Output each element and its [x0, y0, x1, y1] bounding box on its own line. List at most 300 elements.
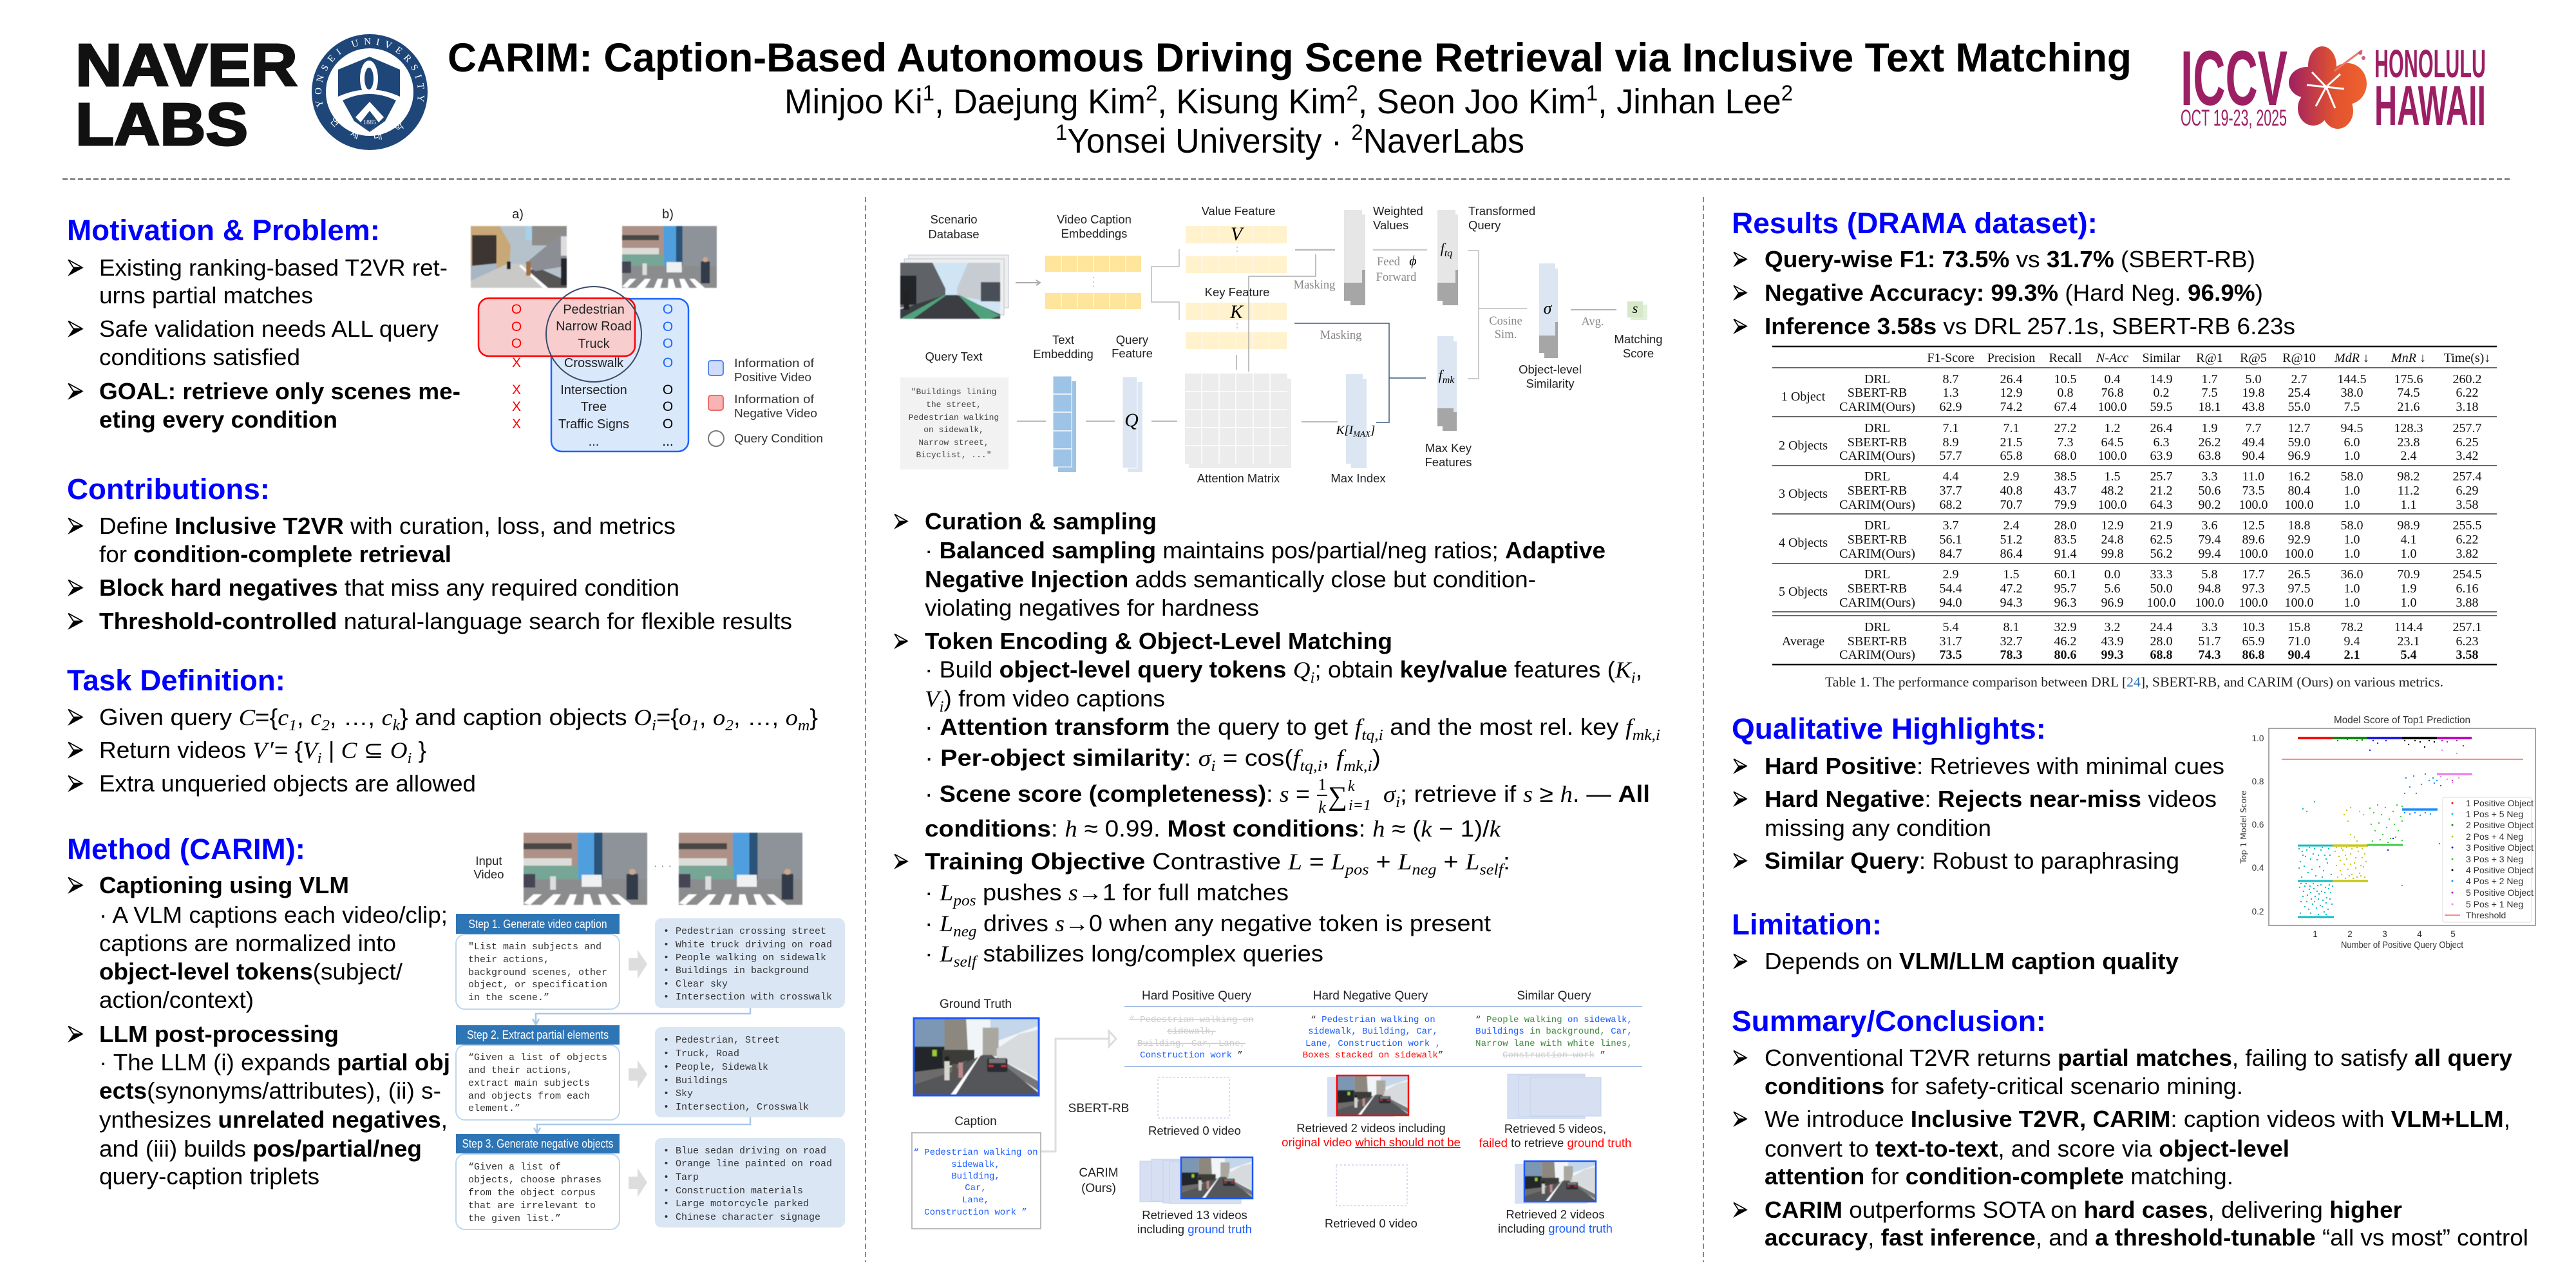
table 1: performance comparison: 5 Objects: [1779, 585, 1828, 599]
figure: qualitative retrieval comparison: [912, 989, 1642, 1236]
table 1: performance comparison: 28.0: [2150, 634, 2173, 649]
authors: , Jinhan Lee: [1598, 82, 1781, 121]
table 1: performance comparison: 89.6: [2242, 533, 2264, 547]
query text and embeddings: Pedestrian walking: [909, 413, 999, 422]
step 3: “Given a list of: [468, 1162, 561, 1173]
logo: NAVER LABS: NAVER: [75, 32, 298, 99]
arrow: step 2 to step 3: [534, 1117, 750, 1133]
query text and embeddings: Embedding: [1033, 347, 1094, 361]
step 1: in the scene.”: [468, 992, 549, 1003]
table 1: performance comparison: 100.0: [2239, 596, 2268, 610]
heading: Task Definition:: [67, 664, 285, 697]
table 1: performance comparison: 71.0: [2287, 634, 2311, 649]
table 1: performance comparison: 100.0: [2195, 596, 2224, 610]
logo: Yonsei University seal: 1885: [363, 119, 376, 126]
step 3: Chinese character signage: [676, 1212, 820, 1223]
table 1: performance comparison: 26.4: [2000, 372, 2022, 386]
curation and sampling: Negative Injection adds semantically close but condition-: [925, 566, 1536, 592]
input video frames: Input: [475, 854, 502, 867]
table 1: performance comparison: ↓: [2360, 351, 2369, 365]
legend: Negative Video: [734, 406, 817, 420]
table 1: performance comparison: CARIM(Ours): [1839, 596, 1915, 610]
query texts: sidewalk,: [1167, 1027, 1216, 1037]
step 2: Pedestrian, Street: [676, 1035, 780, 1046]
query texts: Narrow lane with white lines,: [1475, 1039, 1633, 1049]
table 1: performance comparison: 3.3: [2201, 469, 2218, 484]
legend: 1 Positive Object: [2466, 798, 2533, 808]
table 1: performance comparison: 98.2: [2397, 469, 2420, 484]
table 1: performance comparison: 4 Objects: [1779, 536, 1828, 550]
query text and embeddings: the street,: [926, 400, 981, 410]
result: SBERT-RB hard positive: [1148, 1077, 1241, 1137]
table 1: performance comparison: 67.4: [2054, 400, 2076, 414]
figure: query condition venn diagram: Truck: [578, 337, 611, 351]
figure: query condition venn diagram: X: [512, 399, 521, 414]
query text and embeddings: on sidewalk,: [923, 425, 984, 435]
figure: query condition venn diagram: O: [663, 417, 673, 431]
table 1: performance comparison: 1.7: [2201, 372, 2218, 386]
table 1: performance comparison: 90.2: [2199, 498, 2221, 512]
value and key features: [1186, 204, 1335, 372]
table 1: performance comparison: 46.2: [2054, 634, 2076, 649]
token encoding and object-level matching: [925, 628, 1660, 842]
token encoding and object-level matching: Token Encoding & Object-Level Matching: [925, 628, 1392, 654]
table 1: performance comparison: 96.9: [2287, 449, 2311, 463]
table 1: performance comparison: 68.0: [2054, 449, 2076, 463]
logo: ICCV Honolulu Hawaii: HAWAII: [2374, 75, 2486, 137]
step 1: •: [663, 940, 669, 951]
table 1: performance comparison: 59.0: [2287, 435, 2311, 450]
table 1: performance comparison: Time(s)↓: [2444, 351, 2490, 365]
query headers: Similar Query: [1517, 989, 1591, 1003]
table 1: performance comparison: 7.1: [1942, 421, 1959, 435]
heading: Motivation & Problem:: [67, 214, 380, 247]
authors: 1: [923, 81, 934, 106]
bullet list: Query-wise F1: 73.5% vs 31.7% (SBERT-RB): [1765, 246, 2255, 272]
bullet list: GOAL: retrieve only scenes me-: [99, 378, 460, 404]
result: CARIM similar: including ground truth: [1498, 1222, 1613, 1235]
step 2: Intersection, Crosswalk: [676, 1102, 809, 1113]
table 1: performance comparison: 5.4: [2401, 648, 2416, 662]
authors: 2: [1146, 81, 1157, 106]
table 1: performance comparison: 1.5: [2003, 567, 2020, 582]
step 2: •: [663, 1088, 669, 1099]
table 1: performance comparison: 257.7: [2452, 421, 2482, 435]
step 2: [456, 1025, 845, 1120]
token encoding and object-level matching: 1: [1318, 775, 1327, 794]
result: CARIM hard negative: Retrieved 0 video: [1325, 1217, 1417, 1230]
value and key features: K: [1229, 301, 1244, 323]
step 1: Pedestrian crossing street: [676, 926, 826, 937]
arrow: caption to queries: [1041, 1031, 1116, 1151]
chart: model score of top1 prediction: 4: [2417, 929, 2422, 939]
max key features, similarity, score: Features: [1425, 455, 1472, 469]
token encoding and object-level matching: · Per-object similarity : σi = cos( ftq,i, fmk,i): [925, 744, 1381, 775]
legend: 3 Positive Object: [2466, 842, 2533, 853]
table 1: performance comparison: 114.4: [2394, 620, 2423, 634]
legend: 1 Pos + 5 Neg: [2466, 809, 2523, 819]
table 1: performance comparison: 128.3: [2394, 421, 2423, 435]
table 1: performance comparison: 3.18: [2456, 400, 2478, 414]
ground truth and caption: Building,: [951, 1171, 1000, 1182]
bullet list: and (iii) builds pos/partial/neg: [99, 1135, 422, 1162]
table 1: performance comparison: 94.0: [1940, 596, 1962, 610]
table 1: performance comparison: 56.2: [2150, 547, 2173, 561]
query headers: Hard Negative Query: [1313, 989, 1428, 1003]
affiliations: 2: [1351, 120, 1363, 145]
logo: Yonsei University seal: YONSEI UNIVERSITY: [315, 38, 424, 108]
step 3: the given list.”: [468, 1213, 561, 1224]
legend: Query Condition: [734, 431, 823, 445]
step 1: •: [663, 952, 669, 963]
step 3: •: [663, 1172, 669, 1183]
query text and embeddings: Text: [1052, 333, 1074, 346]
query texts: Buildings in background, Car,: [1475, 1027, 1633, 1037]
table 1: performance comparison: 255.5: [2452, 518, 2482, 533]
table 1: performance comparison: 86.4: [2000, 547, 2022, 561]
table 1: performance comparison: 97.3: [2242, 582, 2264, 596]
table 1: performance comparison: 2 Objects: [1779, 439, 1828, 453]
bullet list: Hard Positive: Retrieves with minimal cues: [1765, 753, 2224, 779]
threshold line: [2282, 759, 2523, 760]
query text and embeddings: Query Text: [925, 350, 983, 363]
logo: ICCV Honolulu Hawaii: ICCV: [2181, 34, 2287, 122]
step 1: •: [663, 992, 669, 1003]
table 1: performance comparison: 100.0: [2098, 400, 2126, 414]
panel: method details text: [894, 508, 1660, 971]
table 1: performance comparison: 18.8: [2287, 518, 2311, 533]
scenario database and video caption embeddings: Scenario: [930, 213, 978, 226]
chart: model score of top1 prediction: Model Score of Top1 Prediction: [2334, 715, 2470, 726]
bullet list: LLM post-processing: [99, 1021, 339, 1047]
figure: CARIM architecture: [900, 204, 1663, 485]
table 1: performance comparison: SBERT-RB: [1848, 634, 1907, 649]
scenario database and video caption embeddings: [900, 213, 1179, 320]
attention matrix and max index: [1185, 374, 1386, 485]
token encoding and object-level matching: · Build object-level query tokens Qi; obtain key/value features (Ki,: [925, 656, 1642, 687]
step 3: [456, 1134, 845, 1229]
step 1: Step 1. Generate video caption: [469, 918, 607, 931]
row labels: SBERT-RB: [1068, 1102, 1129, 1115]
authors: 2: [1346, 81, 1358, 106]
table 1: performance comparison: 94.8: [2199, 582, 2221, 596]
table 1: performance comparison: 95.7: [2054, 582, 2076, 596]
query text and embeddings: [900, 333, 1177, 472]
table 1: performance comparison: 1.0: [2344, 449, 2360, 463]
max key features, similarity, score: Sim.: [1495, 328, 1517, 341]
step 1: [456, 914, 845, 1009]
step 1: background scenes, other: [468, 967, 607, 978]
step 1: Clear sky: [676, 979, 728, 990]
table 1: performance comparison: 60.1: [2054, 567, 2076, 582]
chart: model score of top1 prediction: 0.4: [2252, 863, 2264, 873]
max key features, similarity, score: [1294, 251, 1663, 469]
table 1: performance comparison: 2.4: [2003, 518, 2020, 533]
heading: Results (DRAMA dataset):: [1732, 207, 2098, 240]
table 1: performance comparison: Average: [1782, 634, 1824, 649]
table 1: performance comparison: 19.8: [2242, 386, 2264, 400]
table 1: performance comparison: 8.1: [2003, 620, 2020, 634]
weighted values and transformed query: Query: [1468, 218, 1501, 232]
table 1: performance comparison: 25.4: [2287, 386, 2311, 400]
table 1: performance comparison: 7.5: [2201, 386, 2218, 400]
max key features, similarity, score: Avg.: [1581, 316, 1604, 328]
table 1: performance comparison: 74.3: [2199, 648, 2221, 662]
result: SBERT-RB hard negative: Retrieved 2 videos including: [1296, 1121, 1446, 1135]
table 1: performance comparison: 80.4: [2287, 484, 2311, 498]
figure: query condition venn diagram: Crosswalk: [564, 356, 624, 370]
panel: contributions: [67, 473, 792, 634]
step 3: Blue sedan driving on road: [676, 1146, 826, 1157]
attention matrix and max index: MAX: [1352, 429, 1371, 439]
step 3: Large motorcycle parked: [676, 1198, 809, 1209]
table 1: performance comparison: 144.5: [2338, 372, 2366, 386]
table 1: performance comparison: 91.4: [2054, 547, 2076, 561]
bullet list: ects(synonyms/attributes), (ii) s-: [99, 1077, 441, 1104]
bullet list: eting every condition: [99, 406, 337, 433]
figure: query condition venn diagram: O: [511, 302, 522, 317]
table 1: performance comparison: 32.9: [2054, 620, 2076, 634]
table 1: performance comparison: 6.23: [2456, 634, 2478, 649]
table 1: performance comparison: [1772, 346, 2497, 665]
step 1: •: [663, 979, 669, 990]
table 1: performance comparison: 12.5: [2242, 518, 2264, 533]
table 1: performance comparison: R@1: [2196, 351, 2223, 365]
query text and embeddings: Q: [1124, 410, 1139, 431]
legend: 4 Pos + 2 Neg: [2466, 876, 2523, 886]
table 1: performance comparison: 100.0: [2098, 498, 2126, 512]
table 1: performance comparison: 36.0: [2340, 567, 2363, 582]
table 1: performance comparison: ↓: [2416, 351, 2426, 365]
bullet list: attention for condition-complete matching.: [1765, 1163, 2233, 1189]
query texts: Building, Car, Lane,: [1137, 1039, 1245, 1049]
table 1: performance comparison: 21.5: [2000, 435, 2022, 450]
table 1: performance comparison: 80.6: [2054, 648, 2076, 662]
table 1: performance comparison: 6.29: [2456, 484, 2478, 498]
max key features, similarity, score: Object-level: [1519, 363, 1582, 376]
table 1: performance comparison: SBERT-RB: [1848, 533, 1907, 547]
table 1: performance comparison: 50.6: [2199, 484, 2221, 498]
table 1: performance comparison: 6.3: [2154, 435, 2169, 450]
table 1: performance comparison: 12.9: [2101, 518, 2124, 533]
table 1: performance comparison: 37.7: [1940, 484, 1962, 498]
table 1: performance comparison: 257.4: [2452, 469, 2482, 484]
table 1: performance comparison: 38.5: [2054, 469, 2076, 484]
table 1: performance comparison: 56.1: [1940, 533, 1962, 547]
table 1: performance comparison: 76.8: [2101, 386, 2124, 400]
table 1: performance comparison: SBERT-RB: [1848, 435, 1907, 450]
table 1: performance comparison: DRL: [1864, 567, 1890, 582]
table 1: performance comparison: 17.7: [2242, 567, 2264, 582]
arrow: step 1 to step 2: [533, 1008, 750, 1025]
step 2: •: [663, 1048, 669, 1059]
token encoding and object-level matching: conditions : h ≈ 0.99. Most conditions : h ≈ (k − 1)/k: [925, 815, 1501, 842]
figure: query condition venn diagram: O: [663, 336, 673, 351]
weighted values and transformed query: ϕ: [1409, 252, 1417, 269]
table 1: performance comparison: 25.7: [2150, 469, 2173, 484]
figure: query condition venn diagram: O: [511, 336, 522, 351]
query text and embeddings: Feature: [1112, 346, 1153, 360]
table 1: performance comparison: 3.88: [2456, 596, 2478, 610]
table 1: performance comparison: 94.3: [2000, 596, 2022, 610]
query headers: [1124, 989, 1642, 1066]
table 1: performance comparison: 100.0: [2147, 596, 2175, 610]
query text and embeddings: Bicyclist, ...": [916, 450, 992, 460]
table 1: performance comparison: 18.1: [2199, 400, 2221, 414]
table 1: performance comparison: 260.2: [2452, 372, 2482, 386]
step 2: element.”: [468, 1103, 520, 1114]
table 1: performance comparison: 3.6: [2201, 518, 2218, 533]
table 1: performance comparison: 3.2: [2105, 620, 2120, 634]
table 1: performance comparison: 1.3: [1942, 386, 1959, 400]
table 1: performance comparison: 254.5: [2452, 567, 2482, 582]
table 1: performance comparison: R@5: [2240, 351, 2267, 365]
table 1: performance comparison: 3.58: [2456, 498, 2478, 512]
chart: model score of top1 prediction: 1: [2313, 929, 2318, 939]
table 1: performance comparison: DRL: [1864, 421, 1890, 435]
table 1: performance comparison: 27.2: [2054, 421, 2076, 435]
legend: [2443, 797, 2533, 922]
token encoding and object-level matching: ∑: [1328, 782, 1347, 811]
table 1: performance comparison: 100.0: [2285, 547, 2313, 561]
bullet list: We introduce Inclusive T2VR, CARIM : caption videos with VLM+LLM,: [1765, 1106, 2510, 1132]
figure: query condition venn diagram: a): [512, 207, 524, 222]
query texts: sidewalk, Building, Car,: [1308, 1027, 1438, 1037]
training objective: · Lself stabilizes long/complex queries: [925, 940, 1323, 971]
table 1: performance comparison: 175.6: [2394, 372, 2423, 386]
legend: 5 Pos + 1 Neg: [2466, 899, 2523, 909]
table 1: performance comparison: Recall: [2049, 351, 2082, 365]
bullet list: Similar Query: Robust to paraphrasing: [1765, 848, 2179, 874]
chart: model score of top1 prediction: [2239, 715, 2535, 951]
table 1: performance comparison: 70.9: [2397, 567, 2420, 582]
result: CARIM hard positive: [1137, 1157, 1253, 1236]
token encoding and object-level matching: k: [1318, 798, 1326, 817]
table 1: performance comparison: 100.0: [2098, 449, 2126, 463]
table 1: performance comparison: 26.4: [2150, 421, 2173, 435]
table 1: performance comparison: DRL: [1864, 518, 1890, 533]
legend: 4 Positive Object: [2466, 865, 2533, 875]
step 2: extract main subjects: [468, 1078, 590, 1089]
figure: query condition venn diagram: ...: [662, 434, 674, 449]
chart: model score of top1 prediction: 1.0: [2252, 734, 2264, 743]
table 1: performance comparison: 2.7: [2291, 372, 2307, 386]
panel: task definition: [67, 664, 818, 797]
table 1: performance comparison: 14.9: [2150, 372, 2173, 386]
table 1: performance comparison: 58.0: [2340, 469, 2363, 484]
table 1: performance comparison: 100.0: [2239, 547, 2268, 561]
step 2: “Given a list of objects: [468, 1052, 607, 1063]
step 3: •: [663, 1186, 669, 1197]
authors: 1: [1586, 81, 1598, 106]
table 1: performance comparison: 51.7: [2199, 634, 2221, 649]
bullet: Depends on VLM/LLM caption quality: [1765, 948, 2179, 974]
table 1: performance comparison: 21.6: [2397, 400, 2420, 414]
query texts: Construction work ”: [1502, 1050, 1605, 1061]
legend: Information of: [734, 356, 815, 370]
table 1: performance comparison: 0.4: [2105, 372, 2120, 386]
bullet list: Threshold-controlled natural-language search for flexible results: [99, 608, 792, 634]
figure: query condition venn diagram: O: [511, 319, 522, 334]
step 1: •: [663, 926, 669, 937]
table 1: performance comparison: 6.25: [2456, 435, 2478, 450]
table 1: performance comparison: 10.3: [2242, 620, 2264, 634]
step 2: •: [663, 1062, 669, 1073]
logo: NAVER LABS: LABS: [75, 91, 248, 158]
table 1: performance comparison: 5.4: [1942, 620, 1959, 634]
panel: motivation and problem: [67, 207, 823, 451]
table 1: performance comparison: 74.5: [2397, 386, 2420, 400]
result: CARIM hard negative: [1325, 1165, 1417, 1230]
logo: Yonsei University seal: 연 세 대 학: [330, 117, 404, 140]
table 1: performance comparison: 1.9: [2201, 421, 2218, 435]
weighted values and transformed query: Feed: [1377, 256, 1401, 269]
ground truth and caption: Lane,: [962, 1195, 989, 1206]
figure: query condition venn diagram: b): [662, 207, 674, 222]
table 1: performance comparison: 11.2: [2398, 484, 2420, 498]
table 1: performance comparison: 1.9: [2401, 582, 2416, 596]
table 1: performance comparison: 3.42: [2456, 449, 2478, 463]
table 1: performance comparison: 58.0: [2340, 518, 2363, 533]
panel: qualitative highlights: [1732, 712, 2535, 951]
bullet list: [1733, 753, 2224, 874]
max key features, similarity, score: Masking: [1320, 329, 1361, 342]
bullet list: Safe validation needs ALL query: [99, 316, 439, 342]
table 1: performance comparison: 21.9: [2150, 518, 2173, 533]
legend: Threshold: [2466, 910, 2506, 920]
chart: model score of top1 prediction: 0.6: [2252, 820, 2264, 829]
table 1: performance comparison: 5.0: [2245, 372, 2262, 386]
ground truth and caption: Ground Truth: [940, 998, 1012, 1011]
table 1: performance comparison: 7.5: [2344, 400, 2360, 414]
table 1: performance comparison: 100.0: [2239, 498, 2268, 512]
chart: model score of top1 prediction: Top 1 Model Score: [2239, 790, 2248, 864]
authors: 2: [1781, 81, 1793, 106]
table 1: performance comparison: 2.9: [2003, 469, 2020, 484]
attention matrix and max index: Max Index: [1331, 471, 1386, 485]
bullet list: Conventional T2VR returns partial matches, failing to satisfy all query: [1765, 1045, 2512, 1071]
table 1: performance comparison: 24.4: [2150, 620, 2173, 634]
bullet list: [68, 513, 792, 634]
table 1: performance comparison: 10.5: [2054, 372, 2076, 386]
legend: [708, 356, 823, 446]
figure: query condition venn diagram: O: [663, 399, 673, 414]
value and key features: Value Feature: [1202, 204, 1275, 218]
table 1: performance comparison: F1-Score: [1927, 351, 1975, 365]
logo: ICCV Honolulu Hawaii: [2181, 34, 2486, 137]
table 1: performance comparison: 6.0: [2344, 435, 2360, 450]
attention matrix and max index: Attention Matrix: [1197, 471, 1280, 485]
attention matrix and max index: ]: [1370, 424, 1375, 437]
table 1: performance comparison: 51.2: [2000, 533, 2022, 547]
max key features, similarity, score: mk: [1443, 375, 1455, 386]
table 1: performance comparison: 7.1: [2003, 421, 2020, 435]
table 1: performance comparison: 1.1: [2401, 498, 2416, 512]
result: CARIM hard positive: Retrieved 13 videos: [1142, 1208, 1247, 1222]
table 1: performance comparison: 64.3: [2150, 498, 2173, 512]
chart: model score of top1 prediction: 2: [2347, 929, 2353, 939]
score lines: [2298, 738, 2472, 917]
step 1: "List main subjects and: [468, 942, 601, 952]
step 3: •: [663, 1198, 669, 1209]
bullet list: Negative Accuracy: 99.3% (Hard Neg. 96.9%): [1765, 279, 2263, 306]
bullet list: Hard Negative: Rejects near-miss videos: [1765, 786, 2217, 812]
affiliations: Yonsei University ·: [1067, 122, 1351, 160]
step 2: Step 2. Extract partial elements: [467, 1028, 609, 1041]
max key features, similarity, score: Max Key: [1425, 441, 1472, 455]
weighted values and transformed query: Weighted: [1373, 204, 1423, 218]
panel: limitation: [1732, 908, 2179, 974]
